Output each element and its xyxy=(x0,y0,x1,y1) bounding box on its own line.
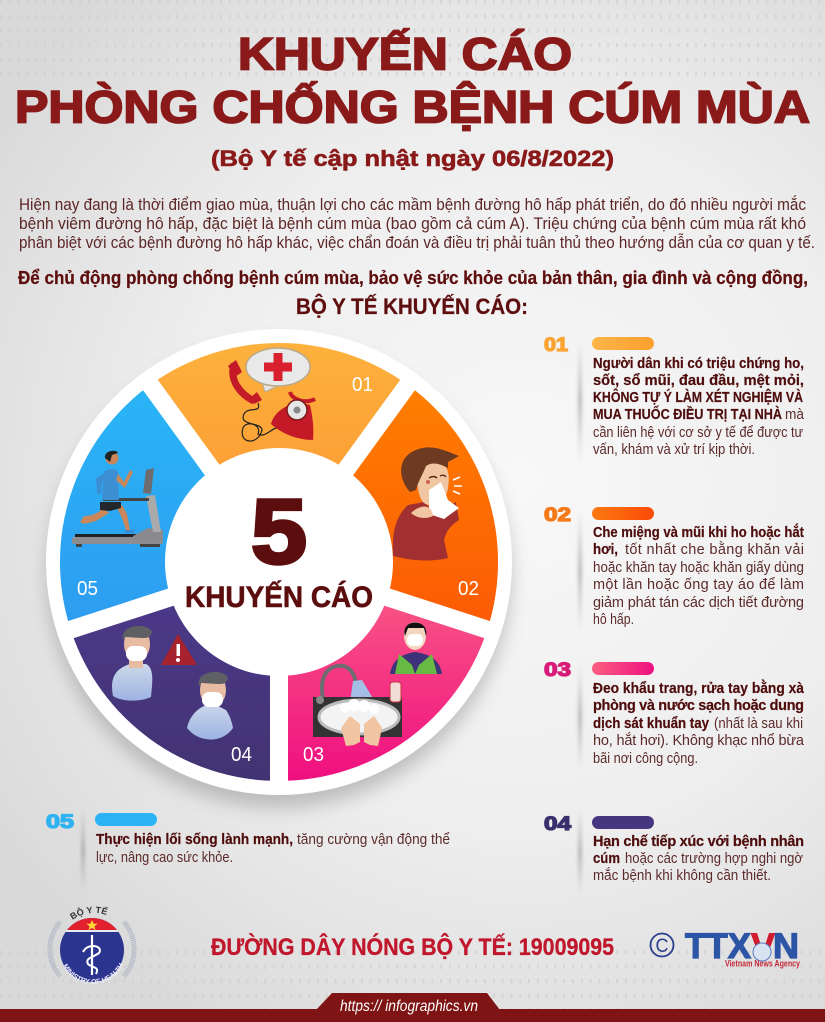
segment numbers: 04 xyxy=(231,744,252,766)
panel: recommendation 03: 03 xyxy=(544,660,571,681)
panel: recommendation 03: Đeo khẩu trang, rửa tay bằng xà xyxy=(593,679,805,697)
panel: recommendation 03: bãi nơi công cộng. xyxy=(593,751,698,767)
segment 02 xyxy=(279,385,498,630)
logo: ministry of health: BỘ Y TẾ xyxy=(70,906,108,920)
icon: telephone xyxy=(228,348,315,441)
website url: https:// infographics.vn xyxy=(340,998,478,1015)
panel: recommendation 04: 04 xyxy=(544,814,572,835)
panel: recommendation 03 xyxy=(544,660,805,770)
panel: recommendation 05: 05 xyxy=(46,812,75,833)
segment 05 xyxy=(60,385,279,630)
segment 01 xyxy=(150,343,408,562)
panel: recommendation 03: (nhất là sau khi xyxy=(714,716,803,732)
panel: recommendation 03: dịch sát khuẩn tay xyxy=(593,716,709,732)
intro paragraph xyxy=(19,195,815,252)
panel: recommendation 02: hơi, xyxy=(593,542,618,558)
panel: recommendation 01: MUA THUỐC ĐIỀU TRỊ TẠI NHÀ xyxy=(593,405,782,423)
logo: TTXVN: V xyxy=(751,927,776,966)
panel: recommendation 02: hoặc khăn tay hoặc khăn giấy dùng xyxy=(593,560,804,576)
segment 04 xyxy=(71,562,279,781)
title: PHÒNG CHỐNG BỆNH CÚM MÙA xyxy=(15,82,810,132)
panel: recommendation 04: cúm xyxy=(593,851,620,867)
panel: recommendation 05 xyxy=(46,808,450,893)
segment numbers: 02 xyxy=(458,578,479,600)
title xyxy=(15,28,810,132)
panel: recommendation 01: vấn, khám và xử trí kịp thời. xyxy=(593,442,755,458)
segment numbers xyxy=(77,374,479,766)
logo: ministry of health: MINISTRY OF HEALTH xyxy=(63,963,124,984)
panel: recommendation 02: tốt nhất che bằng khăn vải xyxy=(625,541,804,558)
segment numbers: 05 xyxy=(77,578,98,600)
center label: KHUYẾN CÁO xyxy=(185,580,373,614)
logo: TTXVN xyxy=(650,927,801,970)
panel: recommendation 02: 02 xyxy=(544,505,571,526)
subtitle: (Bộ Y tế cập nhật ngày 06/8/2022) xyxy=(211,146,614,171)
panel: recommendation 05: Thực hiện lối sống lành mạnh, xyxy=(96,832,293,848)
footer bar xyxy=(0,993,825,1022)
warning triangle xyxy=(161,634,197,665)
panel: recommendation 05: lực, nâng cao sức khỏe. xyxy=(96,850,233,866)
segment numbers: 01 xyxy=(352,374,373,396)
panel: recommendation 02: một lần hoặc ống tay áo để làm xyxy=(593,577,804,593)
icon: sneezing man xyxy=(393,447,462,560)
panel: recommendation 01: sốt, sổ mũi, đau đầu, mệt mỏi, xyxy=(593,373,804,389)
logo: TTXVN: Vietnam News Agency xyxy=(725,958,801,970)
wheel diagram xyxy=(46,329,512,808)
panel: recommendation 01 xyxy=(544,335,805,462)
logo: ministry of health xyxy=(47,906,137,984)
panel: recommendation 02: giảm phát tán các dịch tiết đường xyxy=(593,595,804,611)
panel: recommendation 04 xyxy=(544,810,804,895)
icon: washing hands xyxy=(313,622,442,746)
call to action heading: BỘ Y TẾ KHUYẾN CÁO: xyxy=(296,294,528,319)
logo: TTXVN: N xyxy=(773,927,799,966)
person 1 xyxy=(112,626,152,701)
title: KHUYẾN CÁO xyxy=(238,28,572,80)
panel: recommendation 01: mà xyxy=(785,407,805,423)
call to action heading xyxy=(18,267,808,319)
panel: recommendation 03: ho, hắt hơi). Không khạc nhổ bừa xyxy=(593,732,805,749)
icon: two masked people and warning xyxy=(112,626,233,740)
panel: recommendation 04: hoặc các trường hợp nghi ngờ xyxy=(625,851,803,867)
panel: recommendation 02: Che miệng và mũi khi ho hoặc hắt xyxy=(593,523,804,541)
center number 5: 5 xyxy=(251,481,307,583)
panel: recommendation 01: 01 xyxy=(544,335,568,356)
logo: TTXVN: C xyxy=(656,936,668,957)
panel: recommendation 04: Hạn chế tiếp xúc với bệnh nhân xyxy=(593,834,804,850)
person 2 xyxy=(187,672,233,740)
icon: treadmill runner xyxy=(72,451,163,547)
panel: recommendation 02 xyxy=(544,505,804,632)
panel: recommendation 01: Người dân khi có triệu chứng ho, xyxy=(593,356,804,372)
panel: recommendation 03: phòng và nước sạch hoặc dung xyxy=(593,698,804,714)
panel: recommendation 05: tăng cường vận động thể xyxy=(297,832,450,848)
segment 03 xyxy=(279,562,487,781)
panel: recommendation 02: hô hấp. xyxy=(593,612,634,628)
person with mask and vest xyxy=(390,622,442,674)
segment numbers: 03 xyxy=(303,744,324,766)
panel: recommendation 04: mắc bệnh khi không cần thiết. xyxy=(593,867,771,884)
hotline: ĐƯỜNG DÂY NÓNG BỘ Y TẾ: 19009095 xyxy=(211,933,614,961)
logo: TTXVN: TTX xyxy=(685,927,752,966)
